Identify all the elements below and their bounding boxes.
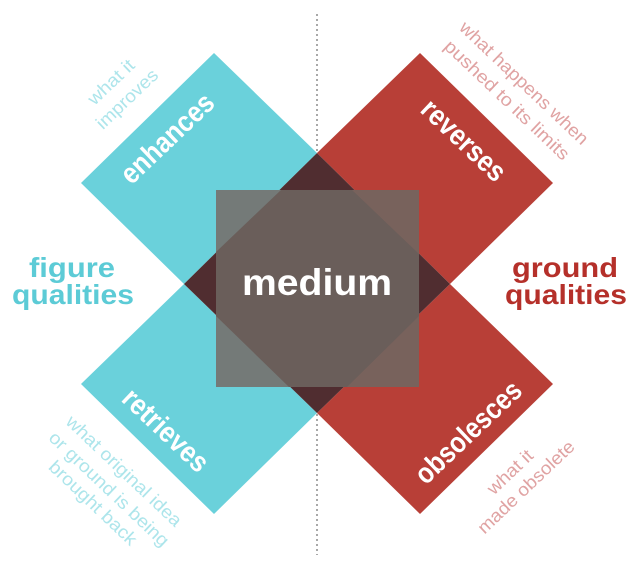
text block: what it improves [83, 55, 162, 133]
text block: what happens when pushed to its limits: pushed to its limits [440, 36, 574, 164]
heading: figure qualities: figure [29, 252, 115, 283]
panel: obsolesces diamond [317, 284, 553, 514]
text block: what it made obsolete: what it [482, 445, 537, 499]
panel: reverses diamond [317, 53, 553, 284]
heading: ground qualities [505, 252, 627, 310]
heading: medium: medium [242, 262, 392, 303]
text block: what original idea or ground is being brought back: brought back [45, 457, 142, 550]
label: reverses: reverses [414, 93, 512, 188]
label: obsolesces: obsolesces [409, 375, 529, 491]
panel: retrieves diamond [81, 284, 317, 514]
text block: what it improves: what it [83, 55, 139, 110]
text block: what it improves: improves [92, 65, 162, 133]
panel: enhances diamond [81, 53, 317, 284]
panel: medium square [216, 190, 419, 387]
panel: dark overlap diamond [184, 153, 450, 413]
text block: what original idea or ground is being brought back: or ground is being [45, 427, 173, 551]
label: enhances: enhances [114, 87, 221, 191]
heading: figure qualities: qualities [12, 279, 134, 310]
text block: what happens when pushed to its limits: what happens when [455, 17, 593, 149]
text block: what it made obsolete: made obsolete [473, 436, 579, 538]
heading: ground qualities: ground [512, 252, 618, 283]
heading: ground qualities: qualities [505, 279, 627, 310]
text block: what original idea or ground is being brought back [45, 411, 187, 551]
text block: what original idea or ground is being brought back: what original idea [61, 411, 187, 531]
label: retrieves: retrieves [115, 382, 215, 479]
heading: figure qualities [12, 252, 134, 310]
